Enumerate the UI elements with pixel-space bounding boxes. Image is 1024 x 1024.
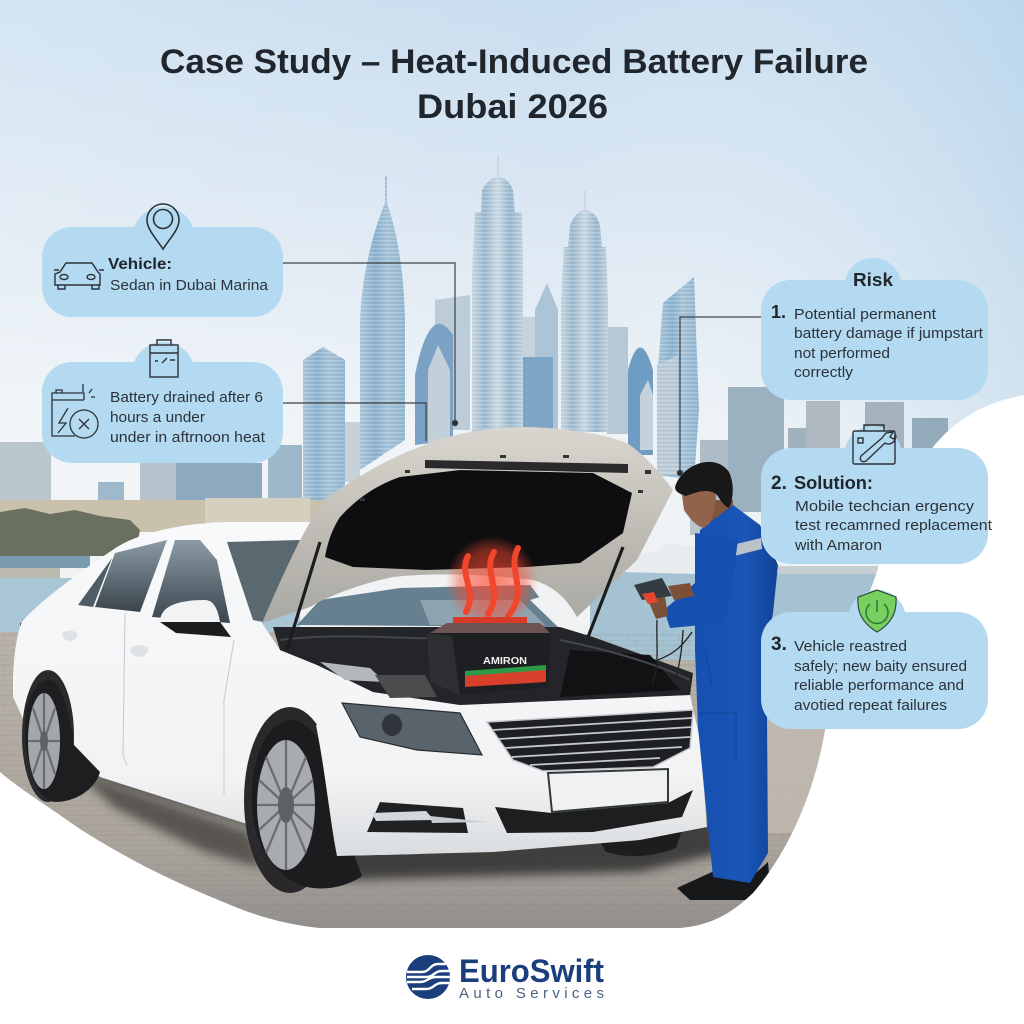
logo mark (406, 955, 450, 999)
number 3: 3. (771, 634, 787, 655)
battery brand: AMIRON (483, 656, 527, 667)
headlight (342, 703, 482, 755)
door lines (123, 613, 234, 795)
rear wheel (25, 680, 100, 802)
sea (0, 572, 885, 672)
battery top (430, 623, 550, 633)
result text (794, 638, 967, 714)
result text: avotied repeat failures (794, 697, 947, 714)
solution text: Mobile techcian ergency (795, 498, 975, 515)
front wheel (252, 720, 362, 888)
battery text: Battery drained after 6 (110, 389, 263, 406)
panel: solution (761, 425, 993, 564)
hood clips (360, 455, 651, 501)
heat glow (446, 536, 538, 628)
open hood (262, 427, 673, 650)
vehicle text: Sedan in Dubai Marina (110, 277, 269, 294)
hot battery (427, 536, 550, 695)
pocket seam (698, 650, 736, 760)
legs and torso (695, 505, 778, 883)
icon: green shield power (858, 590, 896, 632)
mechanic (634, 462, 778, 900)
title: Dubai 2026 (417, 88, 608, 126)
icon: battery (150, 340, 178, 377)
scan tool (634, 578, 672, 604)
grille (487, 710, 693, 771)
arm (664, 533, 738, 628)
yachts (622, 544, 878, 574)
reflective strip (732, 538, 762, 556)
ground shadow (70, 770, 735, 880)
far front wheel (593, 830, 682, 856)
panel: battery drained (42, 340, 283, 463)
battery heat band (453, 617, 527, 623)
icon: battery with clock (52, 384, 98, 438)
risk text (794, 306, 984, 381)
shoes (677, 862, 770, 900)
fog light (367, 802, 488, 833)
car (13, 427, 735, 893)
hair (675, 462, 733, 508)
connector lines (283, 263, 761, 476)
hood struts (287, 542, 623, 650)
white curved frame (0, 395, 1024, 1024)
battery text: under in aftrnoon heat (110, 429, 266, 446)
result text: reliable performance and (794, 677, 964, 694)
logo wordmark: EuroSwift (459, 953, 604, 989)
lower vent (495, 790, 693, 833)
car body (13, 522, 707, 856)
battery side (427, 633, 460, 695)
result text: safely; new baity ensured (794, 658, 967, 675)
front bumper corner (316, 725, 420, 856)
neck (705, 500, 733, 535)
risk heading: Risk (853, 270, 894, 290)
headlight lens (382, 714, 402, 736)
paved ground (0, 623, 1024, 1024)
result text: Vehicle reastred (794, 638, 907, 655)
risk text: battery damage if jumpstart (794, 325, 984, 342)
battery label (465, 669, 546, 687)
number 2: 2. (771, 473, 787, 494)
door handles (62, 630, 148, 657)
logo: EuroSwift (406, 953, 604, 1002)
solution heading: Solution: (794, 473, 873, 493)
risk text: Potential permanent (794, 306, 937, 323)
vehicle text: Vehicle: (108, 256, 172, 273)
distant skyline (0, 387, 948, 535)
battery text (110, 389, 266, 446)
engine bay (273, 627, 693, 705)
hands (648, 583, 694, 619)
logo subtitle: Auto Services (459, 985, 604, 1002)
title (160, 43, 868, 126)
windshield under hood (297, 585, 572, 627)
main towers (300, 150, 700, 500)
hood rail (425, 460, 628, 473)
risk text: not performed (794, 345, 890, 362)
panel: risk (761, 258, 988, 400)
panel: vehicle (42, 204, 283, 317)
waterfront buildings and palms (0, 498, 335, 578)
battery case (427, 633, 550, 695)
number plate (548, 769, 668, 812)
icon: map pin (147, 204, 179, 249)
hood insulation (325, 470, 632, 570)
side mirror (160, 600, 231, 637)
panel: result (761, 590, 988, 729)
rear wheel arch (22, 670, 74, 802)
head (682, 483, 716, 528)
icon: toolbox with wrench (853, 425, 896, 464)
scan tool cables (652, 620, 692, 685)
title: Case Study – Heat-Induced Battery Failure (160, 43, 868, 81)
flames (465, 548, 518, 616)
battery text: hours a under (110, 409, 205, 426)
risk text: correctly (794, 364, 854, 381)
solution text: test recamrned replacement (795, 517, 993, 534)
solution text (794, 498, 993, 554)
side windows (78, 540, 300, 623)
solution text: with Amaron (794, 537, 882, 554)
front wheel arch (244, 707, 336, 893)
number 1: 1. (771, 302, 786, 322)
vehicle text (108, 256, 269, 294)
icon: car (54, 263, 104, 289)
